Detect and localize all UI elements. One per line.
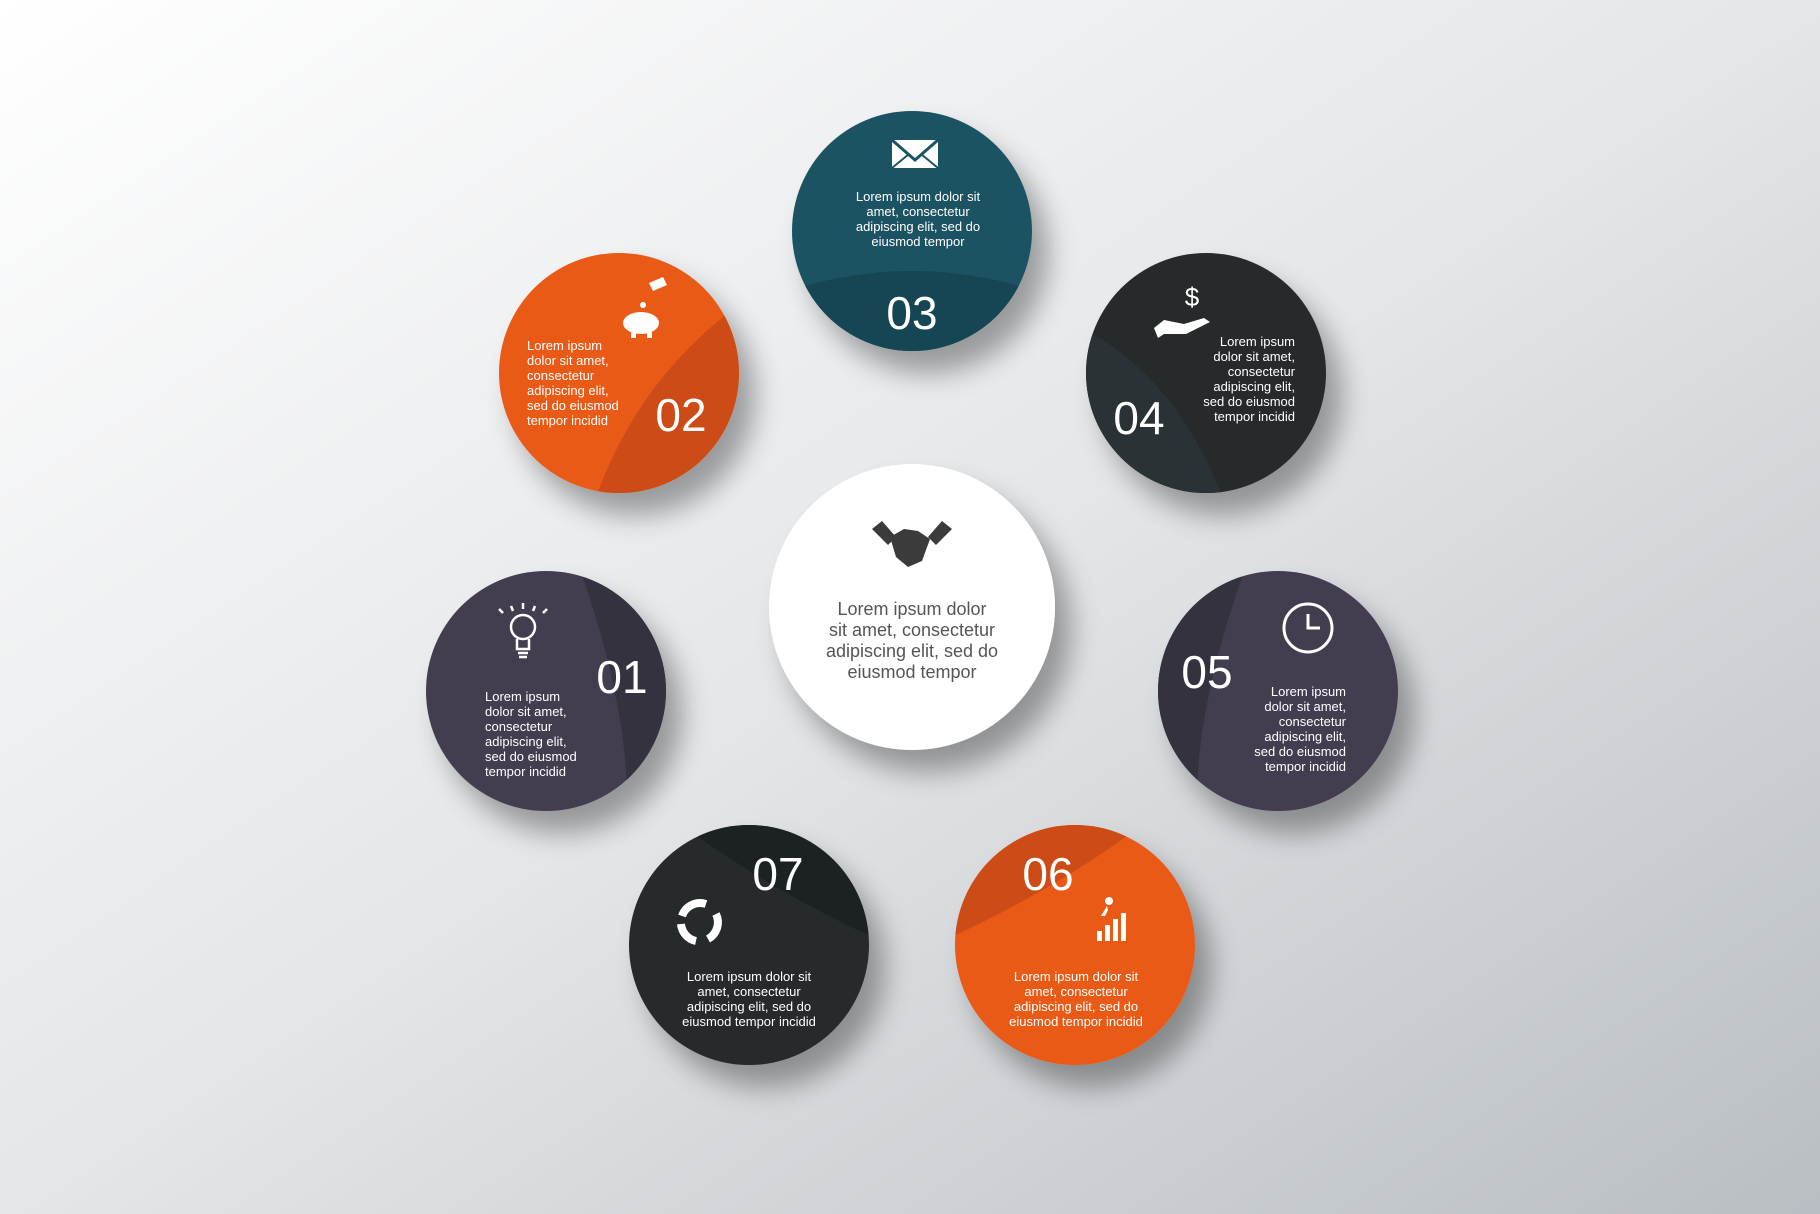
circle 02 [499,253,749,503]
center text [826,599,998,682]
text 02 [527,338,619,428]
icon: envelope [892,140,938,168]
text 05: Lorem ipsum [1271,684,1346,699]
text 01: dolor sit amet, [485,704,567,719]
text 06: eiusmod tempor incidid [1009,1014,1143,1029]
number 06: 06 [1022,848,1074,900]
center text: sit amet, consectetur [829,620,995,640]
number 07: 07 [752,848,804,900]
text 05 [1254,684,1347,774]
text 02: tempor incidid [527,413,608,428]
circle 07 [629,815,879,1065]
text 07: eiusmod tempor incidid [682,1014,816,1029]
text 01: tempor incidid [485,764,566,779]
text 03: Lorem ipsum dolor sit [856,189,981,204]
number 03: 03 [886,287,938,339]
center text: eiusmod tempor [847,662,977,682]
text 05: adipiscing elit, [1264,729,1346,744]
text 03: eiusmod tempor [871,234,965,249]
text 07 [682,969,816,1029]
number 04: 04 [1113,392,1165,444]
circle 06 [945,815,1195,1065]
icon: steps chart [1097,897,1126,941]
text 07: Lorem ipsum dolor sit [687,969,812,984]
text 02: adipiscing elit, [527,383,609,398]
icon: cycle arrows [681,903,718,941]
number 02: 02 [655,389,707,441]
icon: piggy bank [623,277,667,338]
center text: adipiscing elit, sed do [826,641,998,661]
text 05: consectetur [1279,714,1347,729]
number 01: 01 [596,651,648,703]
text 05: tempor incidid [1265,759,1346,774]
text 01: sed do eiusmod [485,749,577,764]
text 01: Lorem ipsum [485,689,560,704]
text 07: adipiscing elit, sed do [687,999,811,1014]
circle 03 [782,111,1042,361]
center circle [769,464,1055,750]
text 01: adipiscing elit, [485,734,567,749]
circle 04 [1076,253,1326,503]
text 03 [856,189,981,249]
circle 01 [426,561,676,821]
text 02: consectetur [527,368,595,383]
text 06: adipiscing elit, sed do [1014,999,1138,1014]
icon: light bulb [499,603,547,657]
text 02: dolor sit amet, [527,353,609,368]
text 02: Lorem ipsum [527,338,602,353]
center text: Lorem ipsum dolor [837,599,987,619]
icon: clock [1284,604,1332,652]
text 04: consectetur [1228,364,1296,379]
text 06: Lorem ipsum dolor sit [1014,969,1139,984]
text 07: amet, consectetur [697,984,801,999]
text 04 [1203,334,1296,424]
text 04: Lorem ipsum [1220,334,1295,349]
icon: handshake [872,521,952,567]
text 01: consectetur [485,719,553,734]
text 01 [485,689,577,779]
icon: hand with dollar [1154,282,1210,338]
icon: hand with dollar: $ [1185,282,1200,312]
text 05: sed do eiusmod [1254,744,1346,759]
text 04: dolor sit amet, [1213,349,1295,364]
text 06: amet, consectetur [1024,984,1128,999]
text 06 [1009,969,1143,1029]
text 04: tempor incidid [1214,409,1295,424]
text 04: sed do eiusmod [1203,394,1295,409]
number 05: 05 [1181,646,1233,698]
circle 05 [1148,561,1398,821]
text 03: adipiscing elit, sed do [856,219,980,234]
text 02: sed do eiusmod [527,398,619,413]
text 05: dolor sit amet, [1264,699,1346,714]
text 04: adipiscing elit, [1213,379,1295,394]
text 03: amet, consectetur [866,204,970,219]
